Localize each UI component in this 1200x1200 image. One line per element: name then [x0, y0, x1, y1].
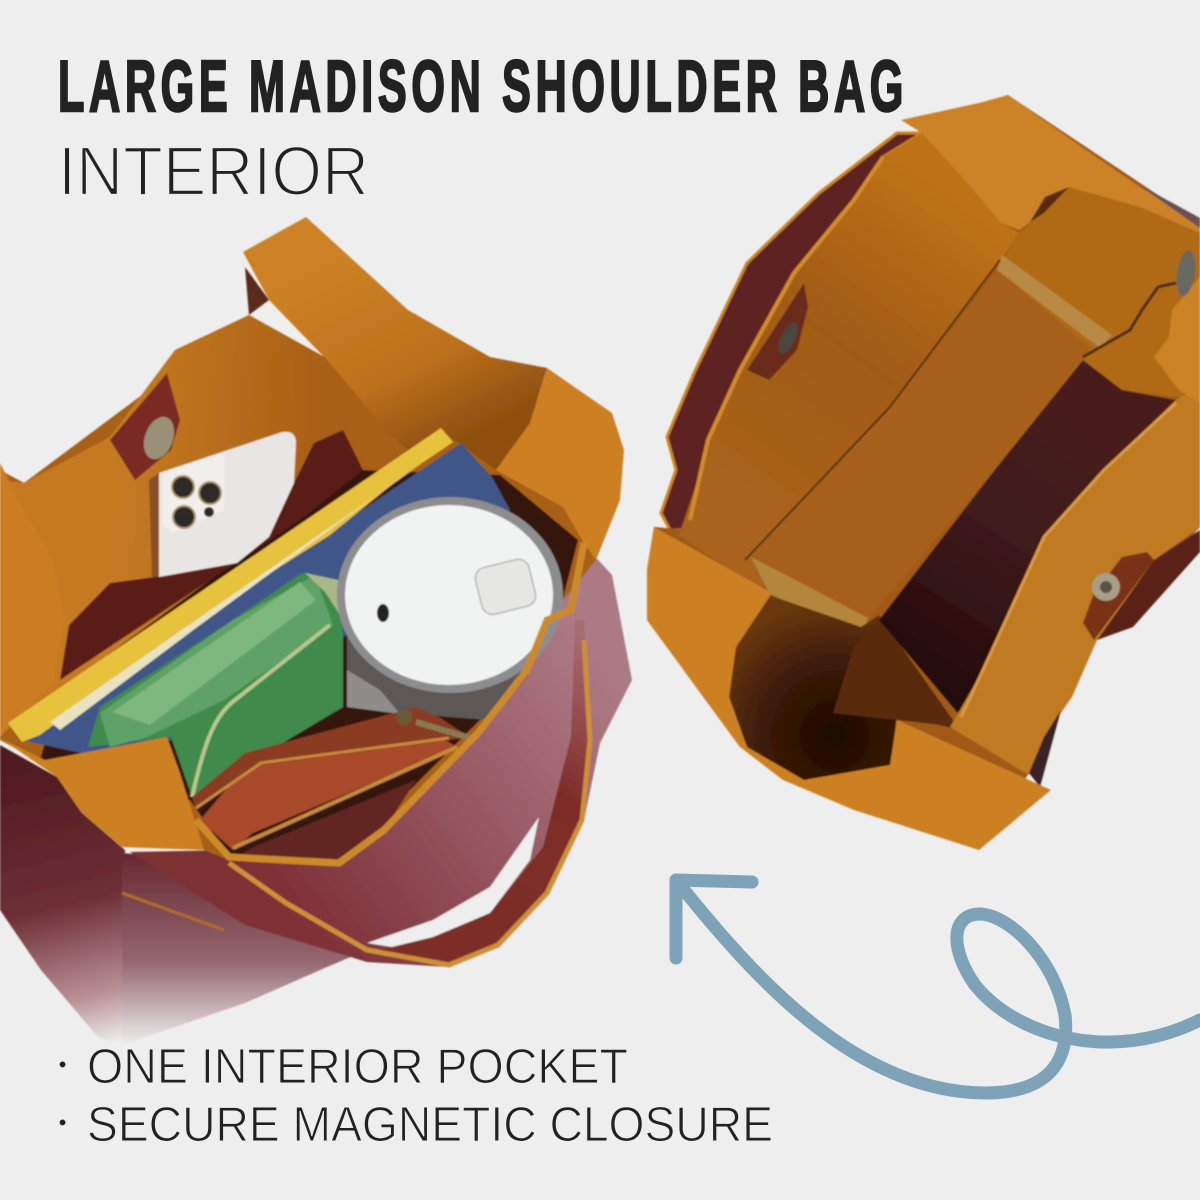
pocket base	[833, 620, 958, 727]
pouch body	[200, 740, 457, 850]
front suede lip	[196, 543, 584, 863]
wallet zip	[192, 625, 330, 797]
green wallet	[88, 573, 343, 797]
exterior side panel	[130, 540, 632, 967]
upper floor strip	[997, 255, 1112, 348]
exterior middle panel	[122, 853, 367, 1045]
zip pull	[416, 722, 470, 738]
top right exterior leather	[1136, 183, 1200, 228]
top right suede corner	[1154, 277, 1200, 403]
floor seam	[745, 260, 1000, 560]
top snap	[1174, 249, 1198, 297]
right tab and snap	[1083, 552, 1154, 640]
camera module	[163, 452, 224, 533]
phone cameras	[172, 476, 221, 528]
dark interior behind contents	[40, 470, 578, 860]
left suede wall	[679, 133, 1019, 590]
lower suede flap	[647, 527, 1051, 850]
back suede wall	[0, 315, 560, 730]
phone	[149, 432, 296, 577]
left bag photo	[0, 217, 632, 1045]
interior pocket	[879, 360, 1176, 717]
title: LARGE MADISON SHOULDER BAG	[58, 46, 910, 127]
wallet flap	[100, 575, 333, 747]
pouch zip band	[192, 707, 469, 810]
book cover	[22, 443, 510, 770]
floor	[751, 270, 1090, 647]
fold shadow	[1030, 187, 1069, 222]
right suede flap	[496, 368, 624, 560]
interior base	[647, 95, 1200, 850]
outer strap	[367, 620, 592, 965]
bright rim of left wall	[690, 157, 883, 520]
handle dark underside	[245, 267, 269, 315]
bullet two: •	[58, 1107, 67, 1137]
lower floor strip	[751, 557, 868, 640]
bullet points	[58, 1040, 773, 1152]
pocket slit	[122, 893, 224, 930]
gap between strap and bag	[367, 817, 539, 950]
curly arrow	[676, 880, 1200, 1093]
book	[8, 428, 510, 770]
right exterior leather	[1097, 530, 1200, 640]
red pouch	[192, 707, 470, 860]
strap tab	[110, 373, 180, 480]
exterior left panel	[0, 745, 125, 1045]
lower interior shadow	[729, 595, 960, 785]
strap and rim	[661, 133, 922, 530]
cup sip hole	[377, 604, 389, 622]
right wall bright edge	[961, 403, 1176, 717]
right bag photo	[647, 95, 1200, 850]
book decorated edge	[8, 428, 453, 742]
interior pocket leather	[60, 430, 363, 680]
subtitle: INTERIOR	[58, 132, 369, 210]
tall suede handle	[243, 217, 547, 470]
front suede corner	[0, 737, 204, 850]
bullet one: •	[58, 1049, 67, 1079]
travel cup	[337, 497, 563, 720]
right suede wall	[950, 387, 1200, 775]
bullet one: ONE INTERIOR POCKET	[87, 1040, 628, 1094]
cup lid button	[473, 557, 538, 617]
wallet olive lining	[305, 573, 340, 615]
top suede fold	[901, 95, 1200, 233]
right top wall	[997, 187, 1200, 400]
strap tan edge	[229, 640, 590, 965]
magnetic snap	[138, 413, 180, 463]
zipper ruffle	[1083, 283, 1176, 357]
left suede flap	[0, 463, 65, 737]
pouch shadow	[240, 780, 416, 860]
left tab and snap	[747, 283, 808, 380]
interior base	[0, 315, 596, 863]
bullet two: SECURE MAGNETIC CLOSURE	[87, 1098, 773, 1152]
